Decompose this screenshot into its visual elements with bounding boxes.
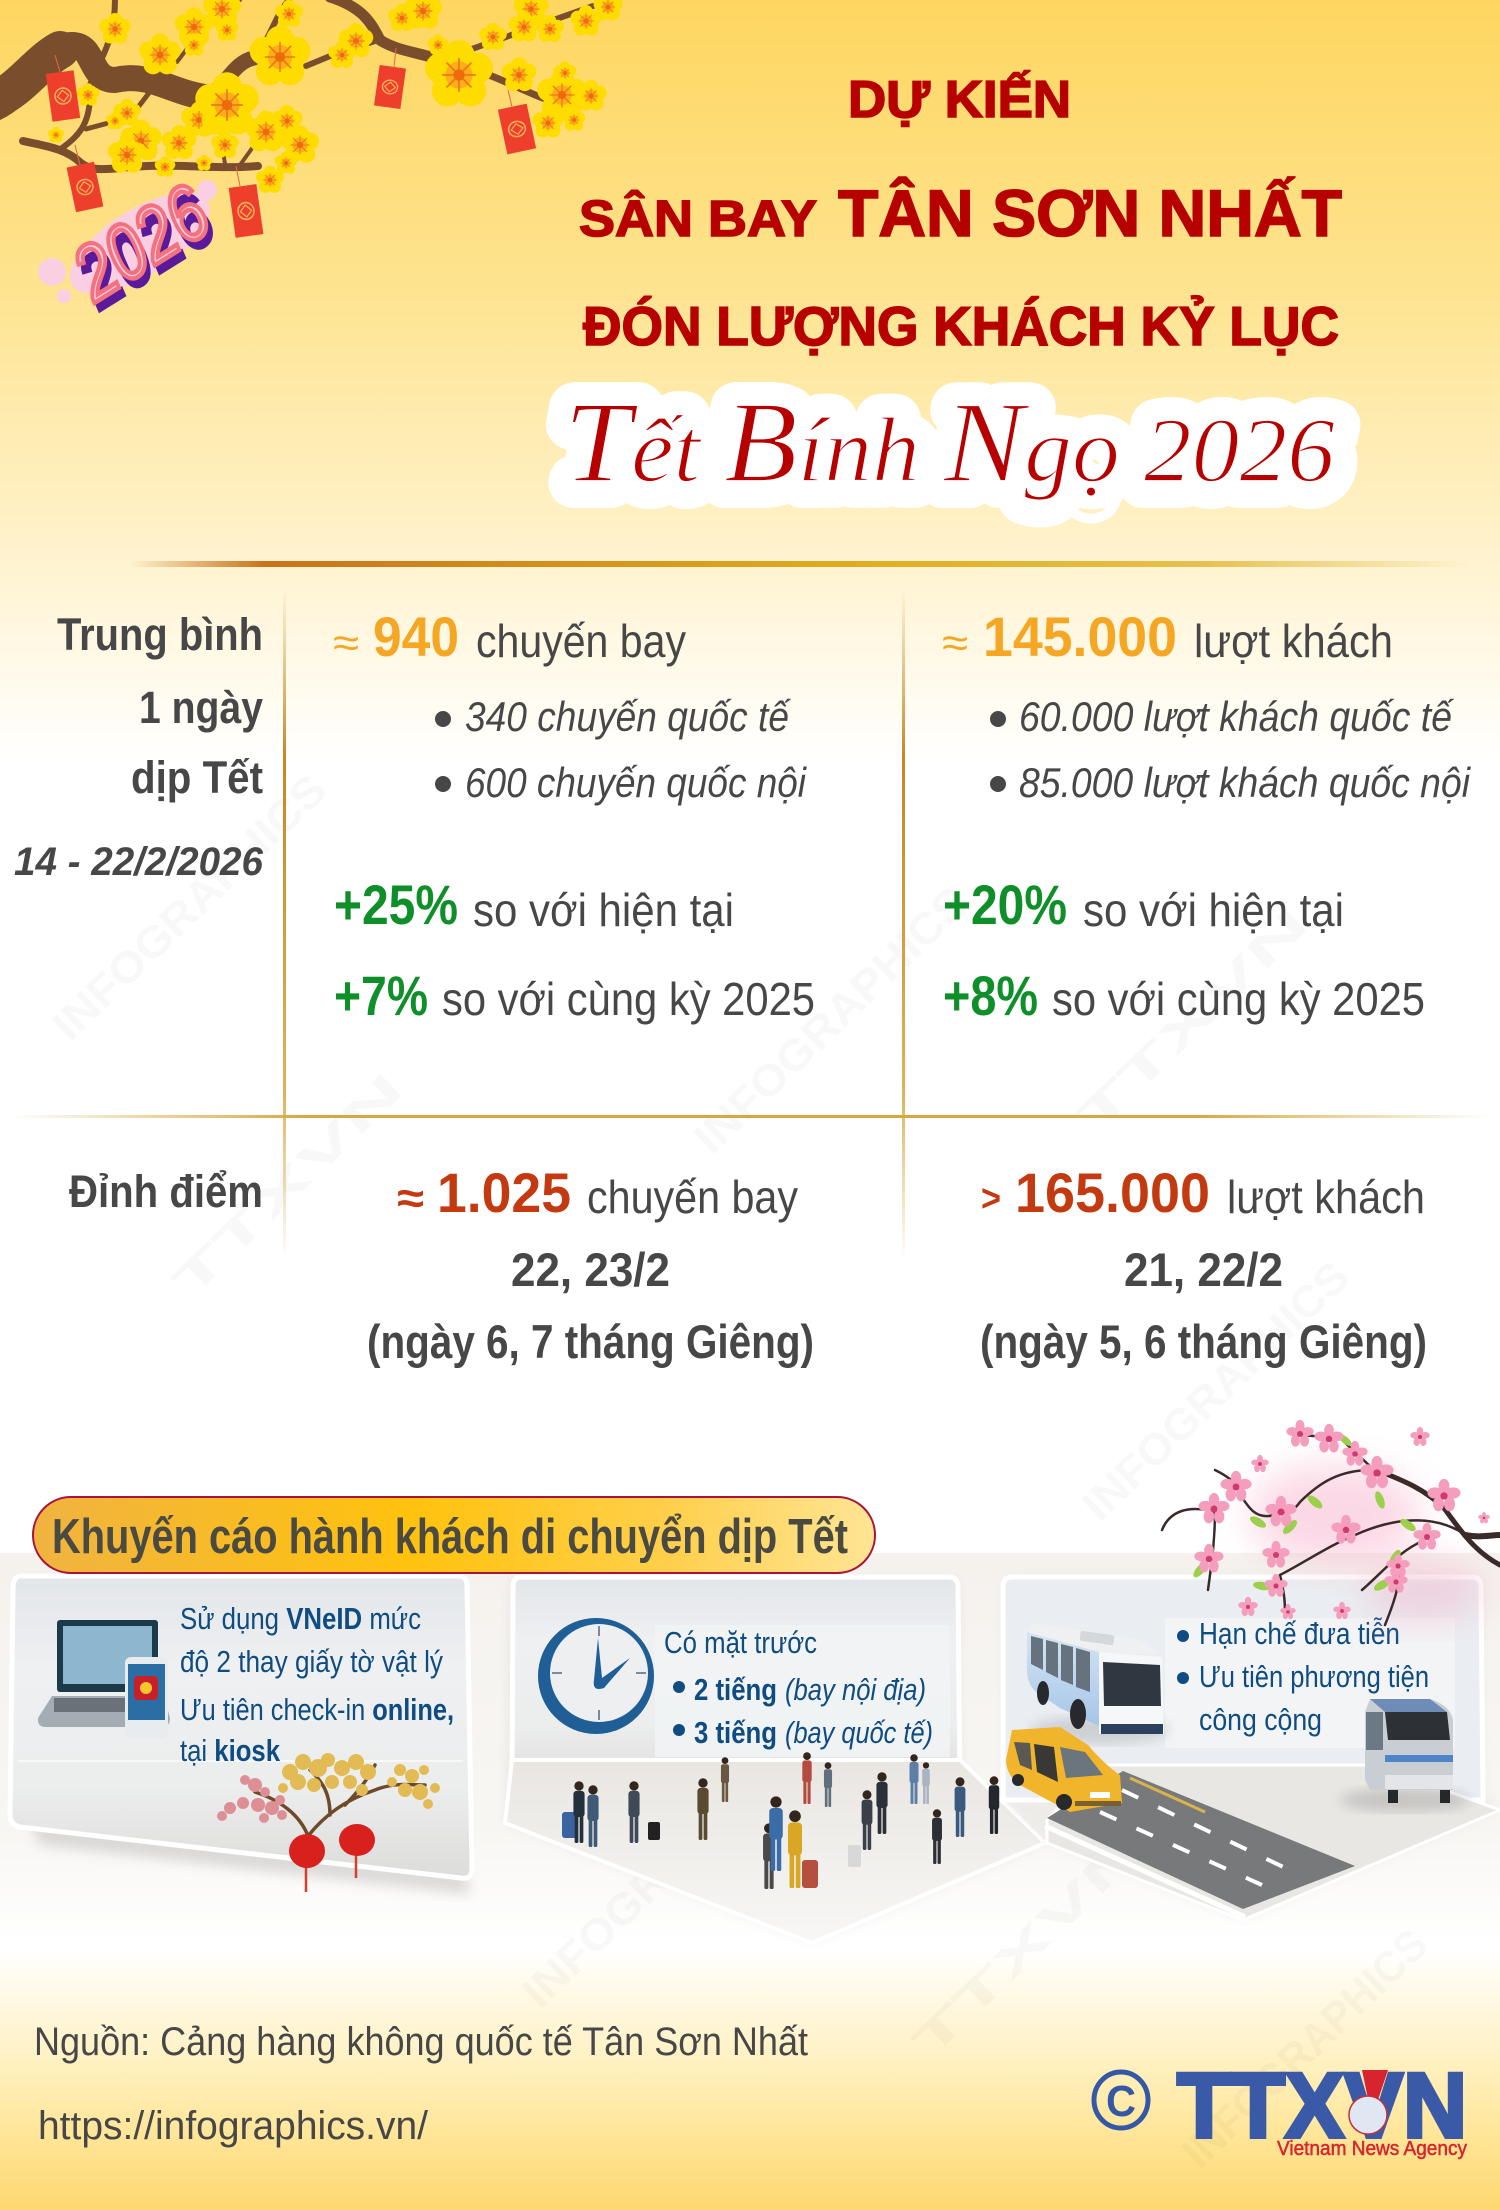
stat: 940 flights [333,605,807,806]
stat: passengers comparison: so với hiện tại [1083,884,1344,936]
stat: 940 flights: 940 [373,605,459,668]
text: arrival advice: Có mặt trước [664,1625,817,1660]
stat: flights comparison: so với cùng kỳ 2025 [442,973,815,1025]
text: TTXVN [163,1064,413,1307]
stat: peak flights: (ngày 6, 7 tháng Giêng) [367,1315,814,1368]
stat: peak passengers: (ngày 5, 6 tháng Giêng) [980,1315,1427,1368]
stat: passengers comparison [943,873,1425,1027]
text: arrival advice: (bay nội địa) [785,1672,926,1707]
row label: Trung bình 1 ngày dịp Tết: Trung bình [57,609,263,660]
text: VNeID advice: độ 2 thay giấy tờ vật lý [180,1644,443,1679]
text: arrival advice: 3 tiếng [694,1715,777,1750]
stat: peak flights: ≈ [397,1174,424,1223]
icon: blossom tree with lanterns [217,1753,440,1892]
panel: arrival time [505,1577,1047,1943]
text: arrival advice [664,1625,933,1750]
stat: peak passengers [980,1161,1427,1368]
icon: passengers [562,1752,999,1889]
icon: laptop and phone [38,1620,170,1739]
title: SÂN BAY [579,189,817,247]
stat: flights comparison [334,873,815,1027]
text: INFOGRAPHICS [1073,1252,1359,1530]
road [1045,1771,1355,1917]
stat: 145.000 passengers: ≈ [942,619,968,666]
banner: Khuyến cáo hành khách di chuyển dịp Tết: Khuyến cáo hành khách di chuyển dịp Tết [52,1510,848,1564]
stat: 145.000 passengers [942,605,1471,806]
stat: flights comparison: +7% [334,964,428,1027]
row label: Trung bình 1 ngày dịp Tết: dịp Tết [131,752,263,803]
icon: cherry blossom branch [1162,1420,1500,1625]
text: transport advice: Hạn chế đưa tiễn [1199,1616,1400,1651]
text: TTXVN [903,1824,1153,2067]
stat: flights comparison: so với hiện tại [473,884,734,936]
icon: truck [1340,1699,1470,1812]
stat: 940 flights: chuyến bay [476,615,686,667]
text: arrival advice: (bay quốc tế) [785,1715,933,1750]
stat: 940 flights: ≈ [333,619,359,666]
icon: apricot blossom branch [0,0,622,238]
stat: 145.000 passengers: 145.000 [983,605,1177,668]
text: VNeID advice: tại kiosk [180,1733,281,1768]
panel: VNeID [10,1576,472,1895]
stat: peak passengers: 165.000 [1015,1161,1210,1224]
stat: peak flights: 1.025 [437,1161,571,1224]
banner: Khuyến cáo hành khách di chuyển dịp Tết [33,1497,875,1573]
source: https://infographics.vn/ [38,2104,429,2148]
title script: Tết Bính Ngọ 2026: Tết Bính Ngọ 2026 [564,381,1335,509]
icon: 2026 sticker: 2026 [56,167,225,318]
text: arrival advice: 2 tiếng [694,1672,777,1707]
logo: TTXVN: C [1106,2077,1136,2126]
title: TÂN SƠN NHẤT [838,176,1342,250]
icon: clock [538,1618,654,1734]
stat: 940 flights: 340 chuyến quốc tế [465,693,791,740]
icon: 2026 sticker: 2026 [61,176,230,327]
text: INFOGRAPHICS [685,878,978,1163]
logo: TTXVN: TTXVN [1177,2055,1467,2157]
icon: bus [1027,1623,1170,1744]
source [34,2020,808,2148]
row label: Đỉnh điểm: Đỉnh điểm [69,1166,263,1217]
stat: passengers comparison: +8% [943,964,1038,1027]
text: transport advice: Ưu tiên phương tiện [1199,1659,1429,1694]
text: TTXVN [1068,899,1318,1142]
source: Nguồn: Cảng hàng không quốc tế Tân Sơn Nhất [34,2020,808,2064]
stat: peak passengers: > [981,1178,1001,1220]
stat: peak passengers: lượt khách [1227,1171,1425,1223]
title: ĐÓN LƯỢNG KHÁCH KỶ LỤC [583,295,1339,357]
row label: Trung bình 1 ngày dịp Tết: 1 ngày [139,682,263,733]
stat: flights comparison: +25% [334,873,458,936]
title [579,70,1342,357]
icon: yellow taxi [1006,1727,1122,1812]
panel: transport [1003,1577,1500,1920]
text: VNeID advice: Sử dụng VNeID mức [180,1601,421,1636]
stat: passengers comparison: +20% [943,873,1067,936]
stat: peak flights: 22, 23/2 [511,1243,670,1296]
text: INFOGRAPHICS [513,1732,806,2017]
logo: TTXVN: Vietnam News Agency [1277,2138,1467,2160]
title: DỰ KIẾN [848,70,1071,129]
text: VNeID advice [180,1601,454,1768]
row label: Trung bình 1 ngày dịp Tết: 14 - 22/2/2026 [14,840,264,884]
text: INFOGRAPHICS [43,765,336,1050]
title script: Tết Bính Ngọ 2026: Tết Bính Ngọ 2026 [564,379,1335,507]
text: INFOGRAPHICS [1173,1920,1437,2177]
stat: peak flights: chuyến bay [587,1171,798,1223]
text: transport advice: công cộng [1199,1702,1322,1737]
stat: 145.000 passengers: 60.000 lượt khách quốc tế [1019,693,1454,740]
text: transport advice [1177,1616,1429,1737]
stat: peak flights [367,1161,814,1368]
stat: 145.000 passengers: lượt khách [1194,615,1393,667]
stat: peak passengers: 21, 22/2 [1124,1243,1283,1296]
stat: passengers comparison: so với cùng kỳ 2025 [1052,973,1425,1025]
stat: 940 flights: 600 chuyến quốc nội [465,759,807,806]
text: VNeID advice: Ưu tiên check-in online, [180,1692,454,1727]
row label: Trung bình 1 ngày dịp Tết [14,609,264,884]
